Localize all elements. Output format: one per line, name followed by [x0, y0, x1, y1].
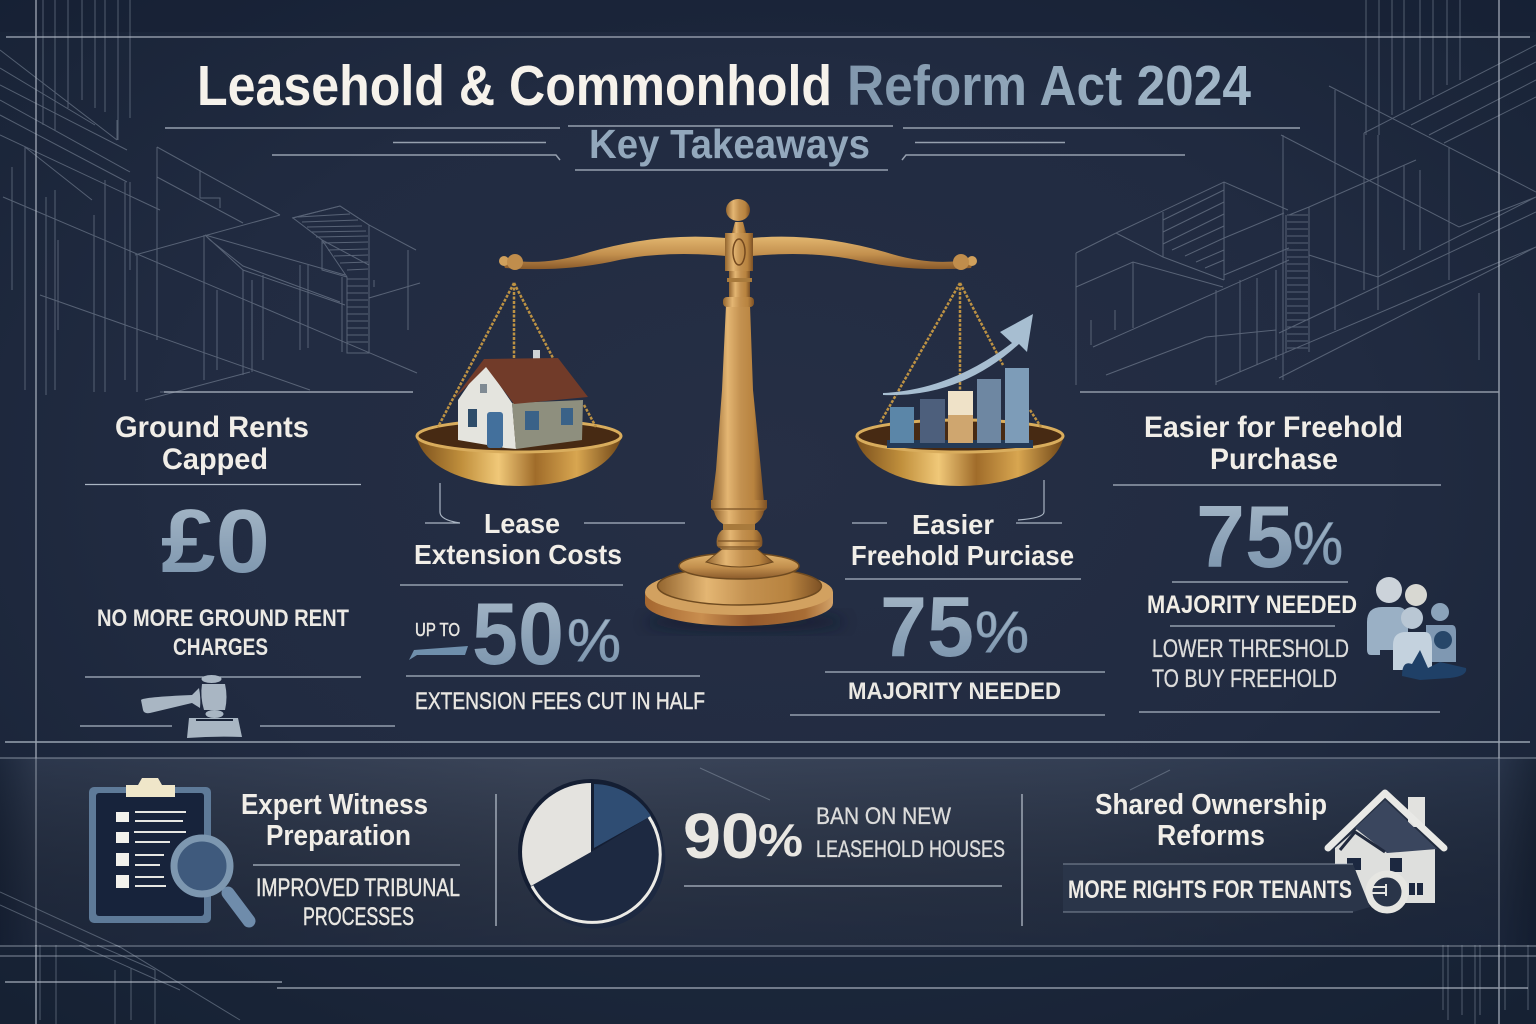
right pan: [855, 420, 1064, 486]
stat: 75%: [1196, 487, 1343, 586]
text: ban on new leasehold houses: BAN ON NEW: [816, 803, 951, 830]
stat: 75%: [880, 580, 1029, 675]
heading: easier for freehold purchase: [1144, 411, 1403, 476]
text: lower threshold: TO BUY FREEHOLD: [1152, 665, 1337, 693]
stat: £0: £0: [161, 492, 270, 592]
icon: people group: [1367, 577, 1466, 680]
text: lower threshold: LOWER THRESHOLD: [1152, 635, 1349, 663]
divider above bottom strip: [5, 741, 1530, 743]
text: extension fees: EXTENSION FEES CUT IN HALF: [415, 688, 705, 715]
base steps: [645, 549, 833, 626]
left pan: [416, 420, 622, 486]
title: Leasehold & Commonhold: [197, 54, 832, 118]
panel: easier for freehold purchase: [1113, 411, 1466, 712]
heading: lease extension costs: Lease: [484, 508, 560, 539]
title: [197, 54, 1251, 118]
text: ban on new leasehold houses: [816, 803, 1005, 863]
heading: expert witness preparation: Expert Witness: [241, 789, 428, 821]
text: improved tribunal processes: PROCESSES: [303, 903, 414, 931]
subtitle: key takeaways: Key Takeaways: [589, 121, 870, 167]
beam and finial: [499, 199, 977, 271]
column and base: [645, 270, 833, 626]
scale of justice: [416, 199, 1064, 632]
icon: house with key: [1328, 793, 1444, 910]
stat: up to 50%: [409, 584, 621, 683]
icon: clipboard with magnifier: [89, 778, 249, 923]
stat: 75%: 75: [880, 580, 974, 675]
heading: lease extension costs: Extension Costs: [414, 539, 622, 570]
text: ban on new leasehold houses: LEASEHOLD HOUSES: [816, 836, 1005, 863]
stat: 90%: %: [758, 814, 803, 866]
text: majority needed: MAJORITY NEEDED: [848, 678, 1061, 705]
stat: 75%: %: [975, 600, 1029, 665]
stat: 90%: [683, 800, 803, 872]
heading: expert witness preparation: Preparation: [266, 820, 411, 852]
panel: easier freehold purchase: [790, 480, 1105, 715]
panel: ground rents capped: [80, 411, 395, 738]
text: improved tribunal processes: IMPROVED TRIBUNAL: [256, 874, 460, 902]
heading: shared ownership reforms: Shared Ownership: [1095, 789, 1327, 821]
left chains: [438, 283, 596, 427]
heading: easier freehold purcaise: Freehold Purciase: [851, 540, 1074, 571]
scale shadow: [645, 612, 845, 632]
ribbon: more rights for tenants: [1063, 864, 1386, 912]
collar: [711, 500, 767, 549]
stat: 75%: %: [1293, 510, 1343, 577]
text: lower threshold: [1152, 635, 1349, 693]
heading: shared ownership reforms: Reforms: [1157, 820, 1265, 852]
heading: easier freehold purcaise: [851, 509, 1074, 571]
heading: ground rents: [115, 411, 309, 476]
heading: expert witness preparation: [241, 789, 428, 852]
heading: easier freehold purcaise: Easier: [912, 509, 994, 540]
text: no more ground rent charges: [97, 605, 349, 661]
text: majority needed: MAJORITY NEEDED: [1147, 591, 1357, 619]
icon: rising bar chart: [883, 314, 1033, 448]
stat: 90%: 90: [683, 800, 759, 872]
stat: up to 50%: UP TO: [415, 620, 460, 640]
text: no more ground rent charges: NO MORE GROUND RENT: [97, 605, 349, 632]
heading: ground rents: Capped: [162, 443, 268, 476]
icon: house on left pan: [453, 350, 588, 449]
heading: easier for freehold purchase: Easier for Freehold: [1144, 411, 1403, 444]
heading: shared ownership reforms: [1095, 789, 1327, 852]
panel: bottom strip: [0, 758, 1536, 956]
text: no more ground rent charges: CHARGES: [173, 634, 268, 661]
ribbon: more rights for tenants: MORE RIGHTS FOR TENANTS: [1068, 876, 1352, 904]
pie chart: [518, 779, 665, 928]
title: Reform Act 2024: [847, 54, 1251, 118]
right chains: [880, 283, 1041, 427]
icon: gavel: [141, 675, 242, 738]
subtitle: key takeaways: [165, 121, 1300, 170]
heading: ground rents: Ground Rents: [115, 411, 309, 444]
stat: up to 50%: 50: [472, 584, 564, 683]
stat: up to 50%: %: [567, 607, 621, 674]
heading: easier for freehold purchase: Purchase: [1210, 443, 1338, 476]
heading: lease extension costs: [414, 508, 622, 570]
stat: 75%: 75: [1196, 487, 1294, 586]
panel: lease extension costs: [400, 483, 705, 715]
text: improved tribunal processes: [256, 874, 460, 931]
